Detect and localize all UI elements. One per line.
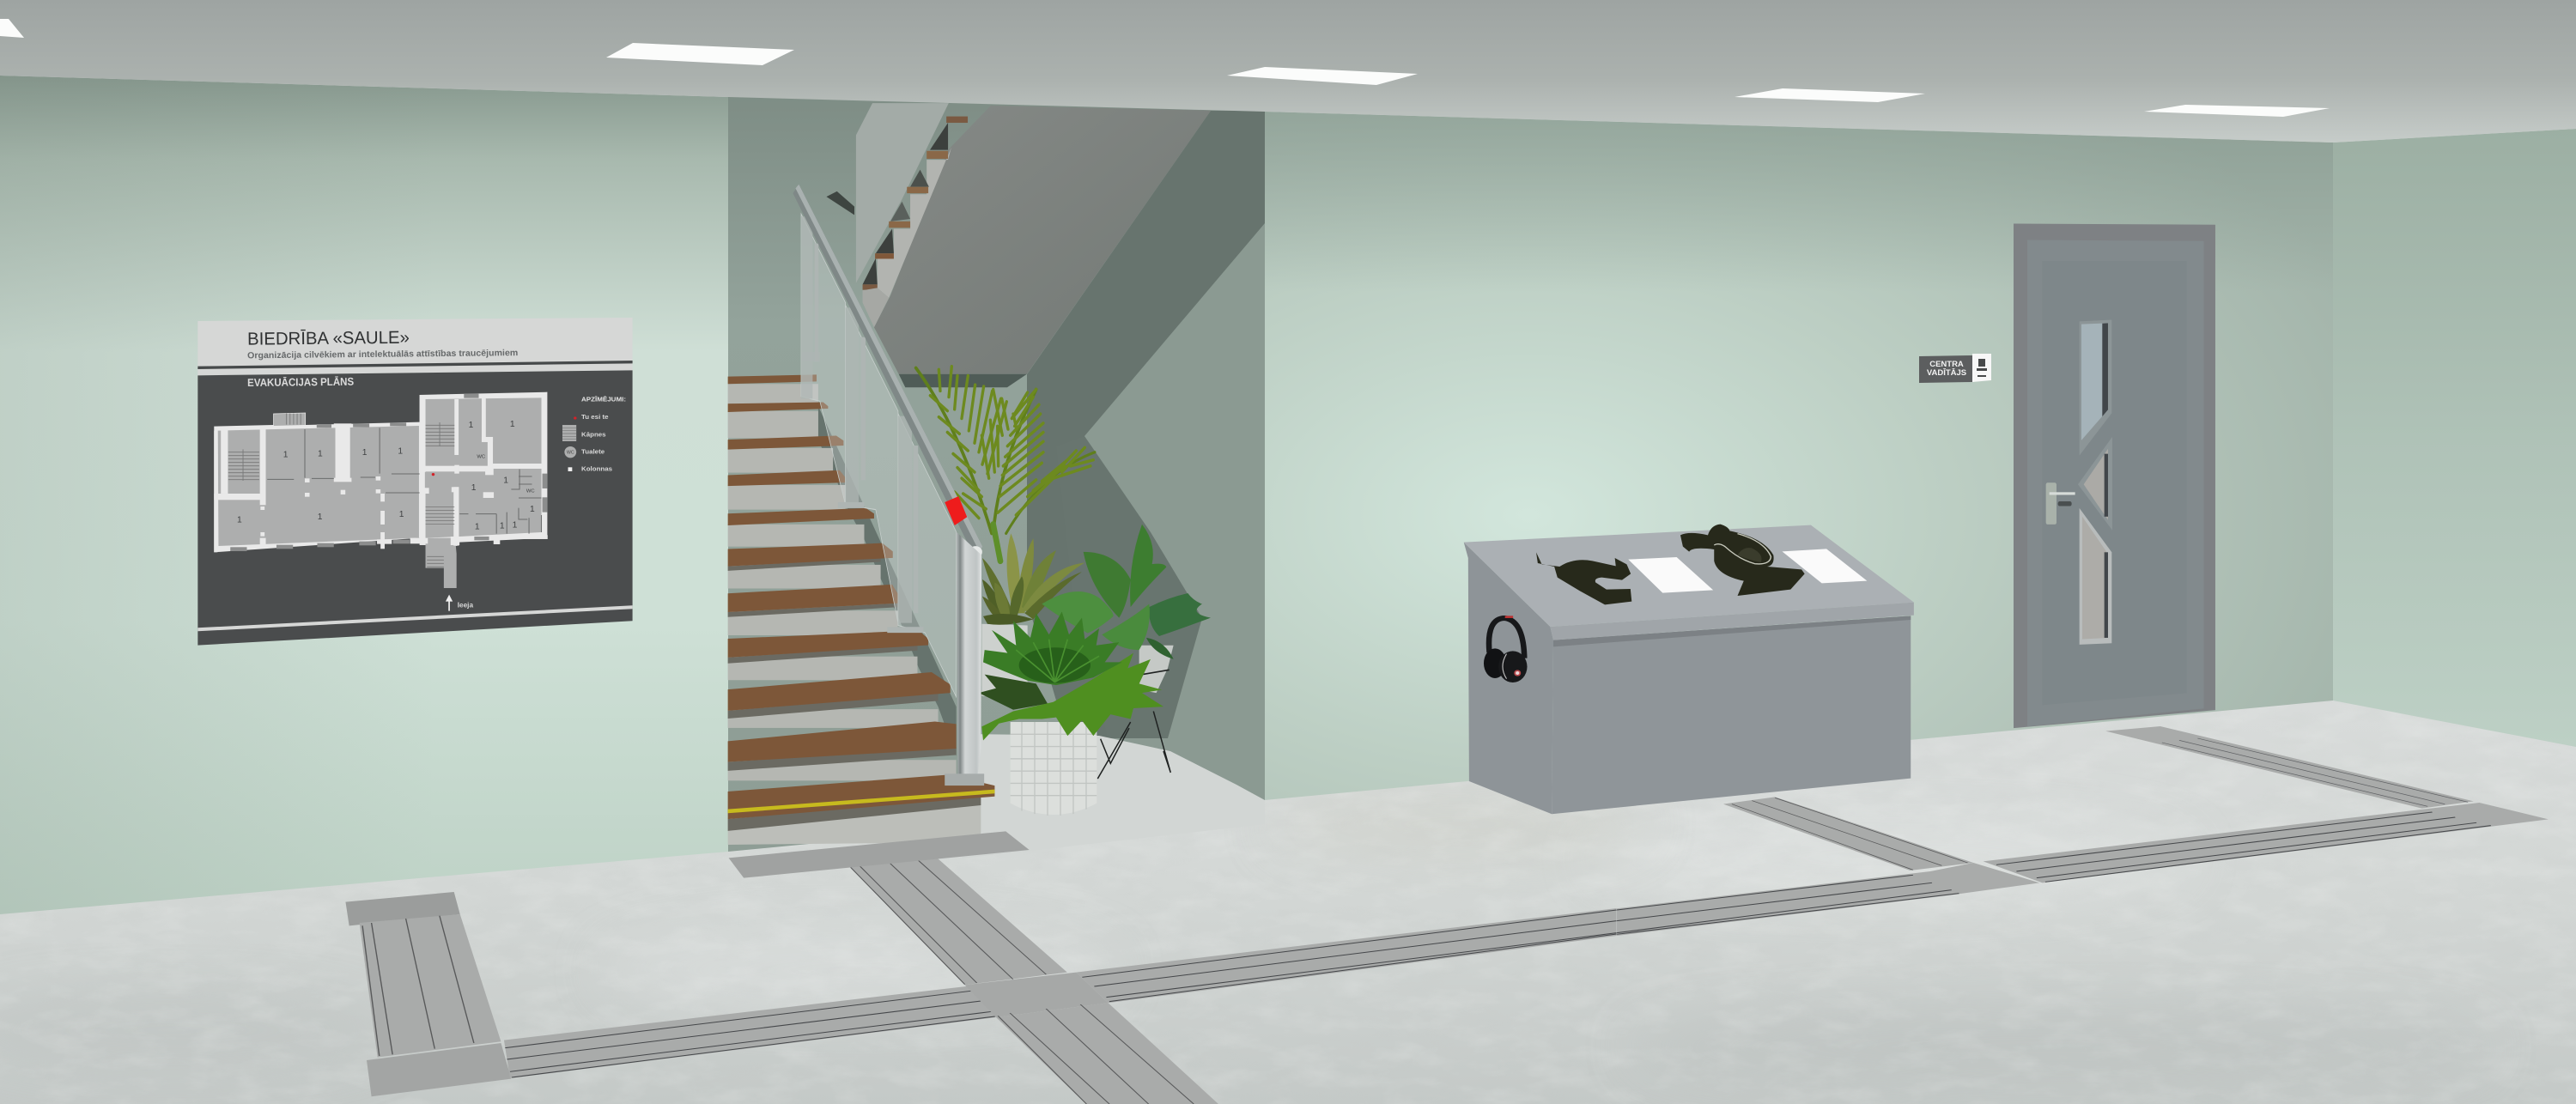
box front: [1552, 616, 1911, 814]
floor plan: 1: [283, 451, 289, 460]
header rule: [197, 361, 633, 369]
sign header: [197, 318, 633, 375]
floor plan: 1: [362, 448, 368, 458]
plant: broad leaves on stand: [1042, 525, 1211, 779]
floor plan: 1: [469, 421, 474, 430]
handrail: [793, 185, 982, 558]
glass balustrade panels: [801, 214, 957, 697]
red rail marker: [945, 496, 967, 525]
end post: [957, 531, 981, 776]
plan heading: EVAKUĀCIJAS PLĀNS: [247, 375, 355, 389]
door window middle: [2078, 437, 2112, 531]
entrance arrow: [446, 595, 474, 611]
branch to door: [2105, 726, 2474, 809]
panel: evacuation plan sign: [197, 318, 633, 646]
entrance arrow: Ieeja: [458, 601, 474, 609]
legend: Tualete: [581, 447, 605, 455]
wall: main right: [1265, 112, 2333, 800]
floor: [0, 670, 2576, 1104]
long strip end and crossing: [1617, 863, 2039, 936]
right strip to corner: [1984, 803, 2549, 883]
sign body: [197, 370, 633, 646]
long horizontal strip: [504, 908, 1617, 1078]
stop bar near left: [367, 1043, 511, 1096]
lid lip: [1550, 603, 1914, 640]
floor plan: 1: [318, 449, 323, 458]
stair warning bar: [729, 831, 1030, 878]
white label 2: [1782, 549, 1867, 583]
legend: [562, 395, 626, 473]
tactile path: right section: [1617, 726, 2549, 936]
door handle: [2046, 482, 2075, 525]
short left strip: [360, 914, 501, 1058]
staircase railing: [793, 185, 984, 786]
floor plan: 1: [475, 522, 480, 531]
door panel: [2042, 261, 2187, 705]
footer rule: [197, 605, 633, 631]
tactile exhibit box: [1464, 525, 1914, 814]
plants group: [916, 367, 1211, 816]
floor plan: 1: [500, 521, 505, 531]
legend: Kāpnes: [581, 430, 606, 438]
wooden treads: [728, 374, 994, 819]
icon panel: [1972, 354, 1991, 382]
crossing square: [965, 973, 1109, 1017]
back wall band under soffit: [899, 374, 1027, 387]
door frame: [2014, 224, 2215, 728]
floor plan: 1: [237, 516, 242, 525]
concrete soffit of upper flight: [874, 106, 1211, 374]
floor plan: 1: [513, 520, 518, 530]
icon: headphones: [1484, 616, 1528, 682]
glass clamps and posts: [801, 216, 923, 633]
white label 1: [1628, 557, 1713, 593]
door: [2014, 224, 2215, 728]
room sign: [1919, 354, 1991, 383]
plant: tall palm: [916, 367, 1095, 561]
plant stand: [1097, 670, 1170, 779]
lower branch: [996, 1003, 1219, 1104]
branch to box: [1723, 797, 1973, 870]
door leaf: [2027, 240, 2204, 726]
floor plan: [214, 392, 548, 588]
floor plan: WC: [477, 455, 485, 460]
upper flight risers and treads: [826, 117, 968, 327]
plant: fan palm: [979, 611, 1163, 740]
floor plan: 1: [399, 510, 404, 519]
box side: [1464, 543, 1553, 814]
plant: white woven pot: [1011, 722, 1097, 816]
plant: bromeliad: [982, 533, 1084, 625]
floor plan: WC: [526, 488, 535, 494]
legend: APZĪMĒJUMI:: [581, 395, 626, 403]
door window top: [2080, 319, 2111, 456]
plant: white planter back: [981, 624, 1028, 699]
post base plate: [945, 773, 984, 786]
floor under stairwell: [962, 734, 1265, 858]
floor plan: 1: [318, 513, 323, 522]
legend: Kolonnas: [581, 465, 613, 473]
lid shadow: [1553, 616, 1911, 646]
staircase: [728, 103, 1211, 845]
sign text: CENTRA: [1929, 360, 1964, 369]
door window bottom: [2080, 508, 2111, 645]
floor plan: 1: [510, 420, 515, 429]
floor plan: 1: [530, 505, 535, 514]
yellow edge marking: [728, 790, 994, 813]
legend: WC: [567, 451, 574, 456]
wall: far right: [2333, 129, 2576, 747]
under-tread shadows: [728, 558, 981, 831]
floor plan: 1: [503, 476, 508, 485]
stairwell back wall: [728, 94, 1265, 852]
sign plate: [1919, 355, 1972, 383]
you-are-here marker: [432, 473, 434, 476]
stair side wedge: [818, 406, 957, 756]
upper flight glass: [856, 103, 949, 283]
stairwell side wall: [1027, 111, 1265, 800]
ceiling: [0, 0, 2576, 143]
room sign: VADĪTĀJS: [1927, 368, 1966, 378]
sign subtitle: Organizācija cilvēkiem ar intelektuālās attīstības traucējumiem: [247, 348, 518, 361]
tactile sculpture 1: [1536, 552, 1631, 604]
ceiling lights: [0, 19, 2330, 117]
concrete risers: [728, 384, 981, 845]
wall: left: [0, 76, 728, 914]
tactile stop bar far left: [345, 892, 460, 925]
tactile path: left section: [345, 831, 1617, 1104]
tactile sculpture 2: [1680, 525, 1805, 596]
lid top: [1464, 525, 1914, 627]
floor plan: 1: [471, 483, 477, 493]
floor plan: 1: [398, 446, 403, 456]
upper flight concrete stringer: [878, 148, 951, 298]
sign title: BIEDRĪBA «SAULE»: [247, 328, 410, 349]
legend: Tu esi te: [581, 413, 609, 421]
branch to stairs: [850, 858, 1067, 985]
